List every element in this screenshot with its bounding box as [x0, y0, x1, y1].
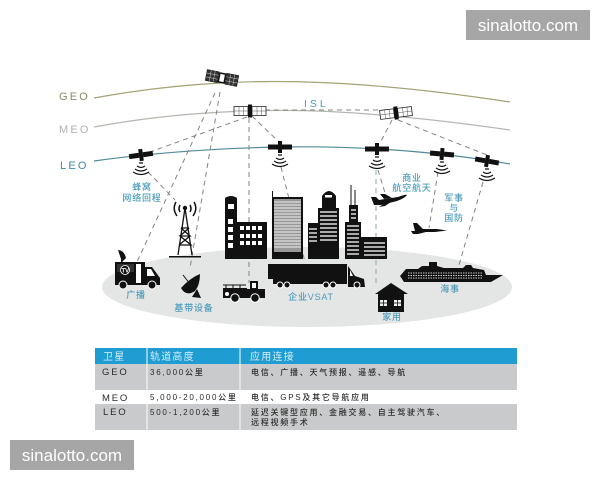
row: LEO: LEO [103, 407, 127, 418]
row: LEO: 延迟关键型应用、金融交易、自主驾驶汽车、 [251, 407, 446, 417]
icon: satellite dish [181, 274, 201, 298]
label: home: 家用 [382, 311, 402, 322]
table header [95, 348, 517, 364]
label: military and defense: 军事 [444, 192, 464, 203]
row: LEO: 500-1,200公里 [150, 408, 221, 417]
orbit curve: LEO [94, 147, 510, 164]
icon: fighter jet [411, 223, 447, 234]
icon: office building 2 [272, 191, 303, 259]
label: cellular backhaul: 蜂窝 [132, 181, 152, 192]
label: broadcast: 广播 [126, 289, 146, 300]
orbit curve: MEO [94, 110, 510, 130]
label: enterprise VSAT: 企业VSAT [288, 291, 334, 302]
label: baseband equipment: 基带设备 [174, 302, 214, 313]
dashed communication links [137, 92, 487, 285]
row: GEO: 36,000公里 [150, 368, 204, 377]
ISL label: ISL [304, 98, 329, 110]
icon: LEO satellite 5 [474, 153, 500, 180]
icon: LEO satellite 3 [365, 143, 389, 168]
label: cellular backhaul [122, 181, 162, 203]
icon: office building 4 [345, 185, 387, 259]
icon: LEO satellite 2 [268, 141, 292, 166]
icon: LEO satellite 4 [430, 147, 454, 174]
icon: cell tower [169, 202, 201, 258]
orbit label: LEO: LEO [60, 160, 89, 172]
icon: GEO satellite [205, 70, 239, 86]
watermark: bottom left: sinalotto.com [22, 446, 122, 465]
row: MEO: MEO [102, 393, 129, 404]
row: MEO [102, 392, 371, 404]
icon: fire truck [223, 281, 265, 302]
orbit label: MEO: MEO [59, 124, 91, 136]
row: GEO: GEO [102, 367, 129, 378]
icon: TV truck: TV [122, 268, 129, 274]
row: LEO: 远程视频手术 [251, 417, 310, 427]
icon: LEO satellite 1 [128, 147, 154, 174]
row: LEO [95, 404, 517, 430]
icon: cruise ship [400, 262, 503, 282]
icon: office building 3 [308, 191, 339, 259]
icon: office building 1 [225, 196, 267, 259]
table header: 卫星 [103, 351, 125, 363]
label: maritime: 海事 [440, 283, 460, 294]
row: GEO: 电信、广播、天气预报、遥感、导航 [251, 367, 407, 377]
icon: MEO satellite 1 [234, 104, 266, 118]
label: military and defense: 国防 [444, 212, 464, 223]
row: MEO: 5,000-20,000公里 [150, 393, 238, 402]
table [95, 348, 517, 430]
orbit label: GEO: GEO [59, 91, 90, 103]
label: military and defense [444, 192, 464, 223]
watermark: top right: sinalotto.com [478, 16, 578, 35]
table header: 轨道高度 [150, 350, 195, 363]
label: cellular backhaul: 网络回程 [122, 192, 162, 203]
label: commercial aviation: 商业 [402, 172, 422, 183]
ground ellipse [102, 247, 512, 327]
watermark: top right [466, 10, 590, 40]
watermark: bottom left [10, 440, 134, 470]
label: commercial aviation: 航空航天 [392, 182, 432, 193]
icon: semi truck [268, 264, 365, 288]
label: commercial aviation [392, 172, 432, 193]
label: military and defense: 与 [449, 203, 459, 213]
row: GEO [95, 364, 517, 390]
orbit curve: GEO [94, 82, 510, 102]
icon: airliner [371, 194, 407, 207]
table header: 应用连接 [250, 350, 295, 363]
icon: MEO satellite 2 [379, 105, 413, 121]
icon: TV truck [115, 250, 160, 289]
icon: house [375, 283, 408, 312]
row: MEO: 电信、GPS及其它导航应用 [251, 392, 371, 402]
